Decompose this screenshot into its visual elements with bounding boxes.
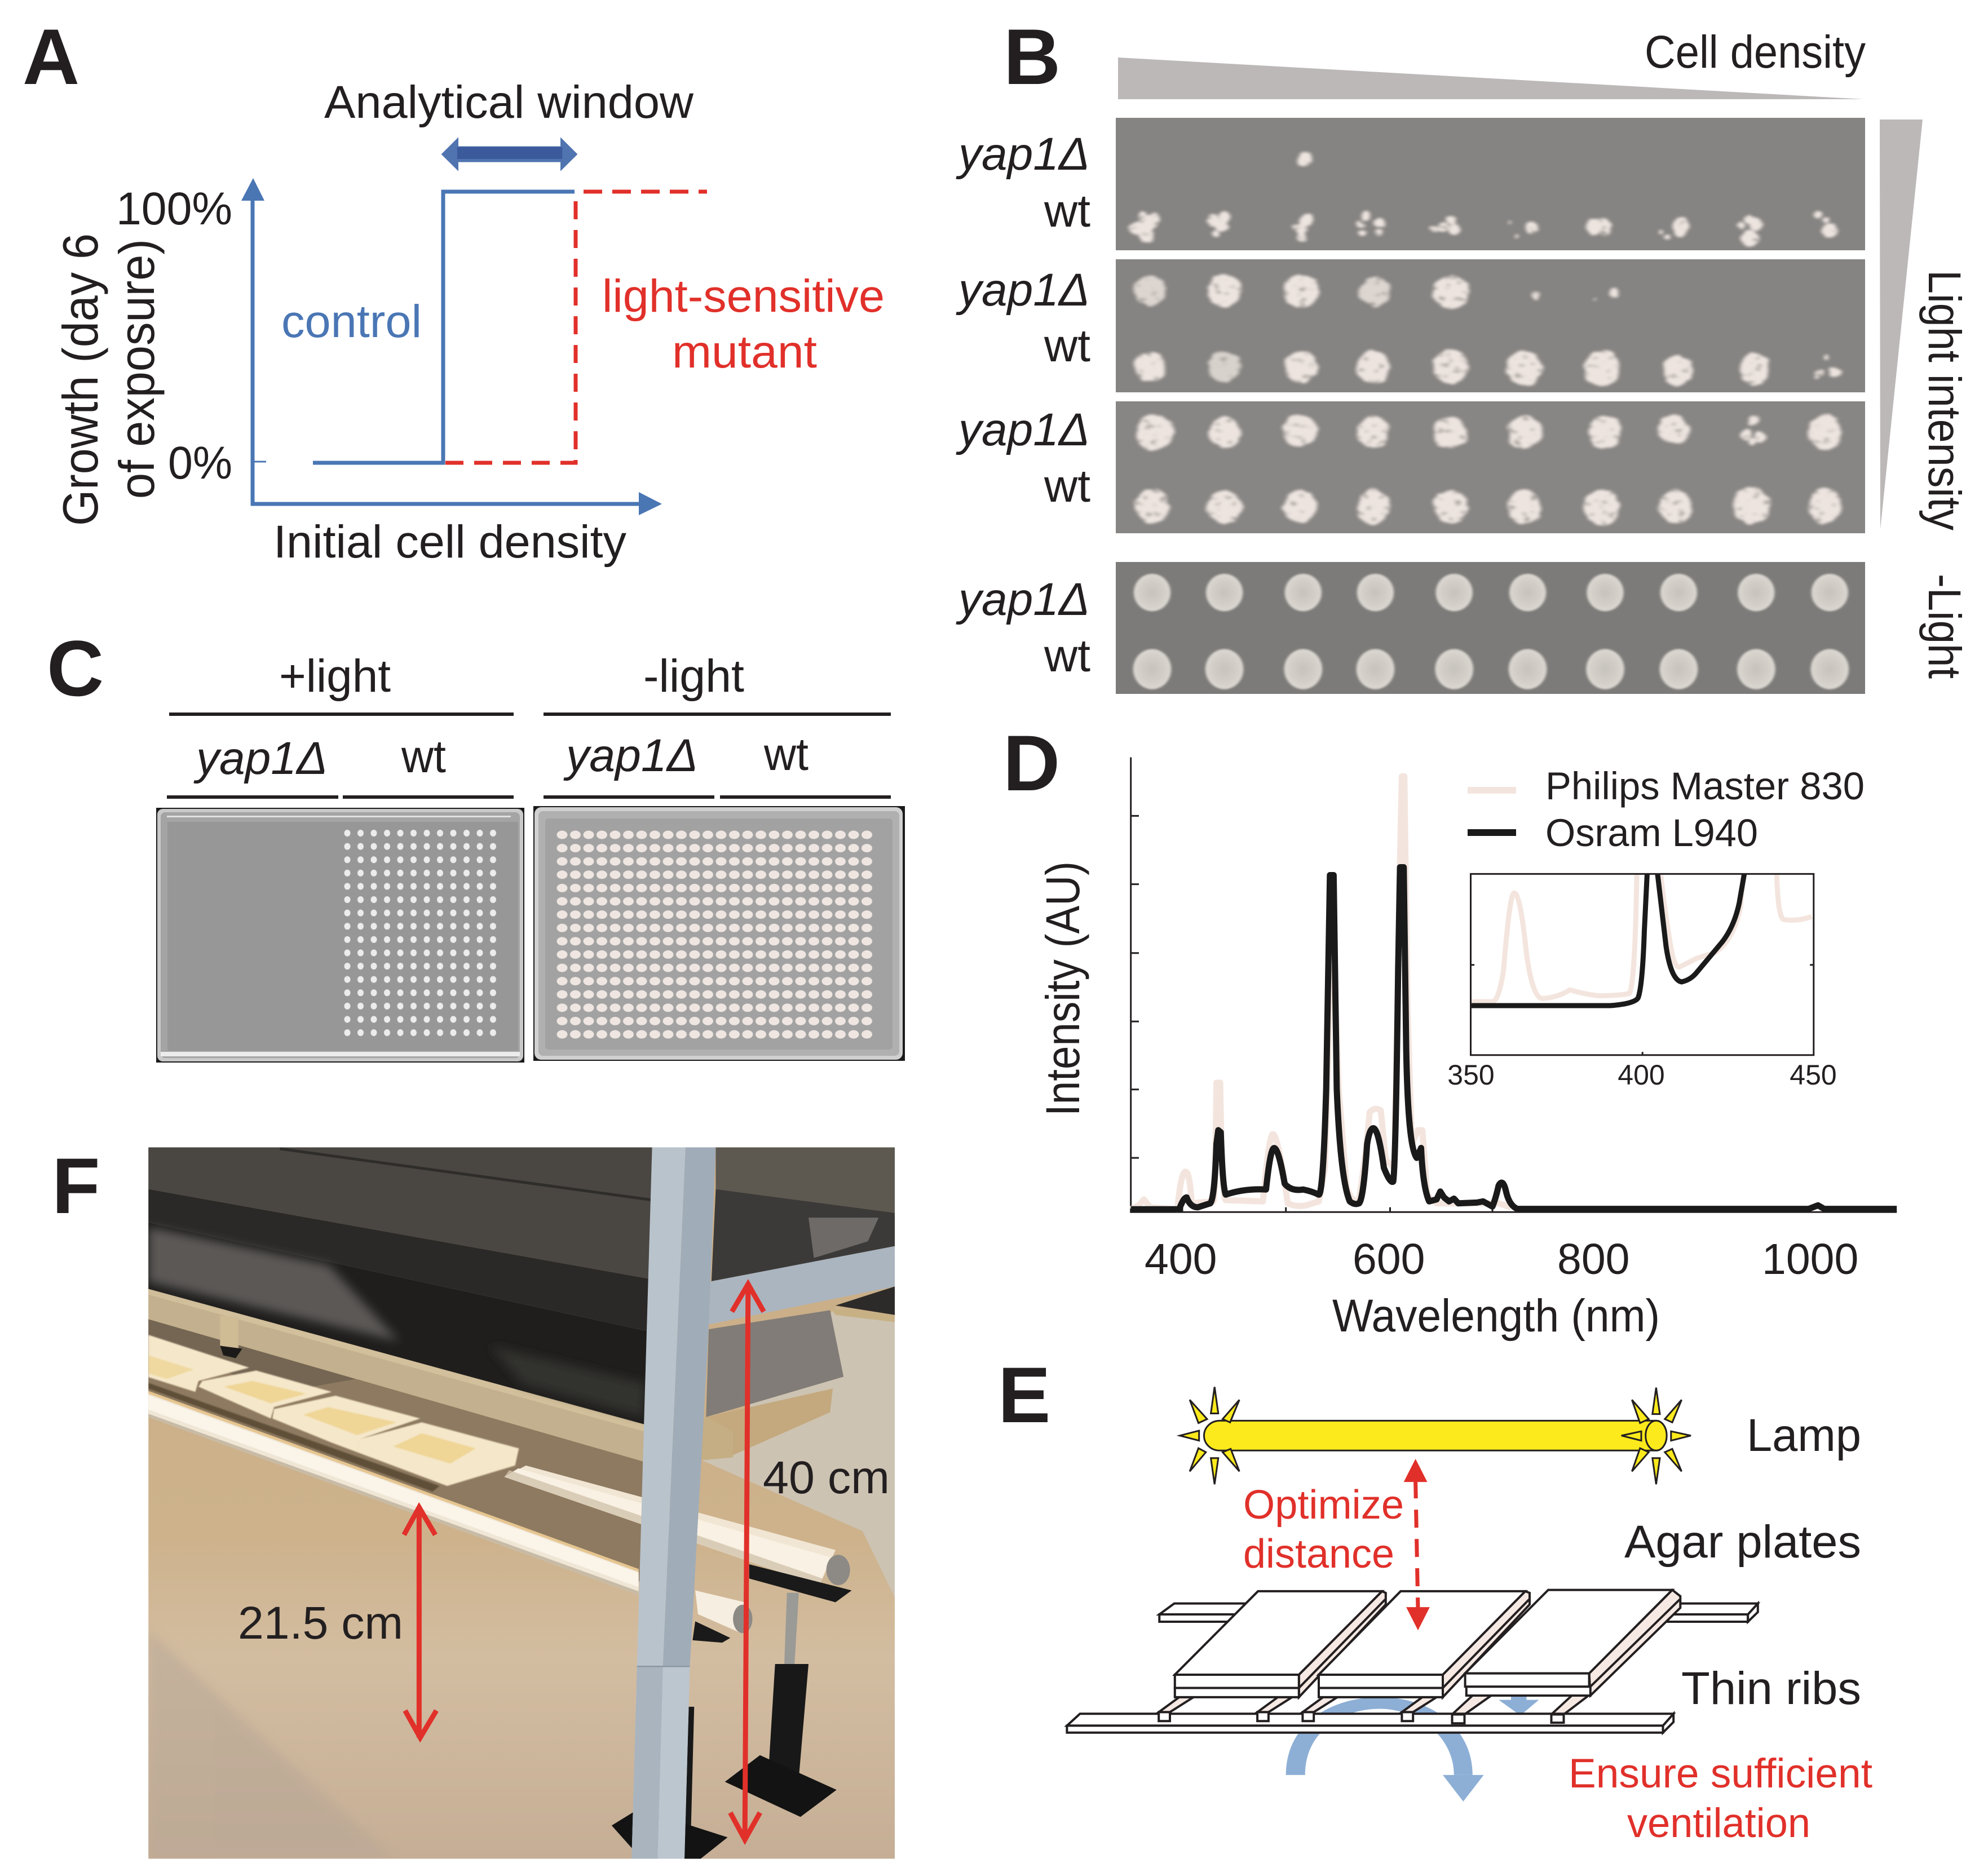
Philips spectrum [1131, 776, 1511, 1209]
inset tick labels: 400 [1618, 1059, 1665, 1091]
spectrum chart [1131, 757, 1897, 1212]
label: 40 cm: 40 cm [763, 1452, 890, 1503]
gel: highest light intensity [1116, 118, 1865, 250]
plates and ribs diagram [1067, 1590, 1758, 1733]
panel label D: D [1003, 719, 1060, 807]
gel: medium-high light intensity [1116, 259, 1865, 392]
back rib [1159, 1604, 1758, 1622]
panel label C: C [47, 624, 104, 712]
thin ribs label: Thin ribs [1681, 1663, 1861, 1714]
mutant label [602, 271, 885, 378]
inset tick labels: 350 [1447, 1059, 1495, 1091]
minus light header [544, 650, 891, 716]
x axis label: Initial cell density [273, 516, 626, 568]
strain labels: wt [1044, 320, 1090, 371]
light intensity label: Light intensity [1919, 270, 1970, 530]
y axis arrow [241, 178, 266, 506]
control curve [313, 192, 575, 463]
no light label: -Light [1919, 574, 1970, 679]
plus light header: +light [279, 650, 391, 702]
agar plate left [1175, 1591, 1386, 1697]
heading: analytical window: Analytical window [324, 77, 694, 128]
y tick label 100%: 100% [116, 183, 232, 234]
y axis label: of exposure) [109, 239, 165, 499]
strain labels: yap1Δ [956, 129, 1090, 180]
x tick labels: 1000 [1762, 1235, 1858, 1284]
strain labels: wt [1044, 185, 1090, 237]
rib ends [1159, 1712, 1564, 1723]
agar plates label: Agar plates [1624, 1516, 1861, 1568]
arrow: 40 cm [730, 1284, 764, 1840]
strain labels [956, 129, 1090, 681]
ventilation label [1569, 1751, 1872, 1846]
inset tick labels: 450 [1790, 1059, 1837, 1091]
inset chart [1470, 868, 1814, 1055]
agar plate right [1465, 1590, 1680, 1696]
gel: no light [1116, 562, 1865, 694]
light-sensitive mutant dashed curve [445, 192, 707, 463]
legend: Osram L940 [1545, 811, 1758, 855]
control label: control [281, 296, 422, 347]
ventilation arrows [1286, 1696, 1539, 1802]
cell density label: Cell density [1645, 26, 1866, 78]
panel B: spot assays [956, 12, 1970, 694]
legend: Philips Master 830 [1545, 764, 1865, 808]
arrow: 21.5 cm [404, 1507, 436, 1738]
panel F: photograph of setup [52, 1141, 895, 1858]
panel label A: A [23, 12, 79, 101]
optimize distance arrow [1404, 1459, 1430, 1630]
back lamp tube [504, 1466, 836, 1586]
plates under lamp [148, 1335, 519, 1492]
agar plate middle [1319, 1591, 1530, 1697]
strain labels: yap1Δ [956, 264, 1090, 316]
thin cross ribs [1159, 1696, 1589, 1714]
y tick label 0%: 0% [168, 437, 232, 489]
light intensity wedge [1880, 120, 1923, 529]
strain headers: wt [401, 731, 446, 782]
strain headers: yap1Δ [193, 733, 328, 784]
legend [1468, 764, 1865, 855]
lamp label: Lamp [1747, 1410, 1861, 1461]
optimize distance label [1243, 1482, 1404, 1577]
minus light header: -light [643, 650, 744, 702]
plus light header [169, 650, 514, 716]
strain headers: wt [763, 729, 809, 780]
Osram spectrum [1131, 868, 1897, 1209]
panel label B: B [1004, 12, 1061, 101]
ventilation label: ventilation [1627, 1800, 1810, 1846]
cell density wedge [1118, 57, 1863, 99]
ventilation label: Ensure sufficient [1569, 1751, 1872, 1796]
gel: lower light intensity [1116, 401, 1865, 533]
arrow: analytical window double arrow [441, 137, 577, 171]
x tick labels [1145, 1235, 1858, 1284]
x tick labels: 600 [1353, 1235, 1425, 1284]
plate: without light [533, 806, 905, 1061]
strain headers [167, 729, 891, 799]
panel C: agar plates [47, 624, 905, 1063]
x tick labels: 400 [1145, 1235, 1217, 1284]
panel E: setup diagram [998, 1351, 1872, 1846]
panel D: emission spectra [1003, 719, 1897, 1342]
lamp [1180, 1387, 1691, 1484]
x tick labels: 800 [1557, 1235, 1629, 1284]
label: 21.5 cm: 21.5 cm [238, 1597, 403, 1649]
y axis label: Growth (day 6 [52, 233, 108, 526]
panel label F: F [52, 1141, 100, 1230]
strain headers: yap1Δ [563, 730, 698, 781]
strain labels: wt [1044, 630, 1090, 681]
y axis label: Intensity (AU) [1036, 861, 1089, 1116]
y axis label [52, 233, 165, 526]
strain labels: wt [1044, 461, 1090, 512]
x axis label: Wavelength (nm) [1332, 1290, 1660, 1342]
inset tick labels [1447, 1059, 1837, 1091]
plate: with light [156, 808, 524, 1063]
strain labels: yap1Δ [956, 574, 1090, 625]
optimize distance label: distance [1243, 1532, 1394, 1577]
panel A: growth schematic [23, 12, 885, 568]
x axis arrow [251, 492, 662, 515]
panel label E: E [998, 1351, 1050, 1439]
mutant label: mutant [672, 326, 817, 378]
mutant label: light-sensitive [602, 271, 885, 322]
strain labels: yap1Δ [956, 404, 1090, 455]
front lamp tube [148, 1391, 745, 1633]
front rib [1067, 1714, 1673, 1733]
optimize distance label: Optimize [1243, 1482, 1404, 1528]
photo of lamps and frame [148, 1147, 895, 1858]
